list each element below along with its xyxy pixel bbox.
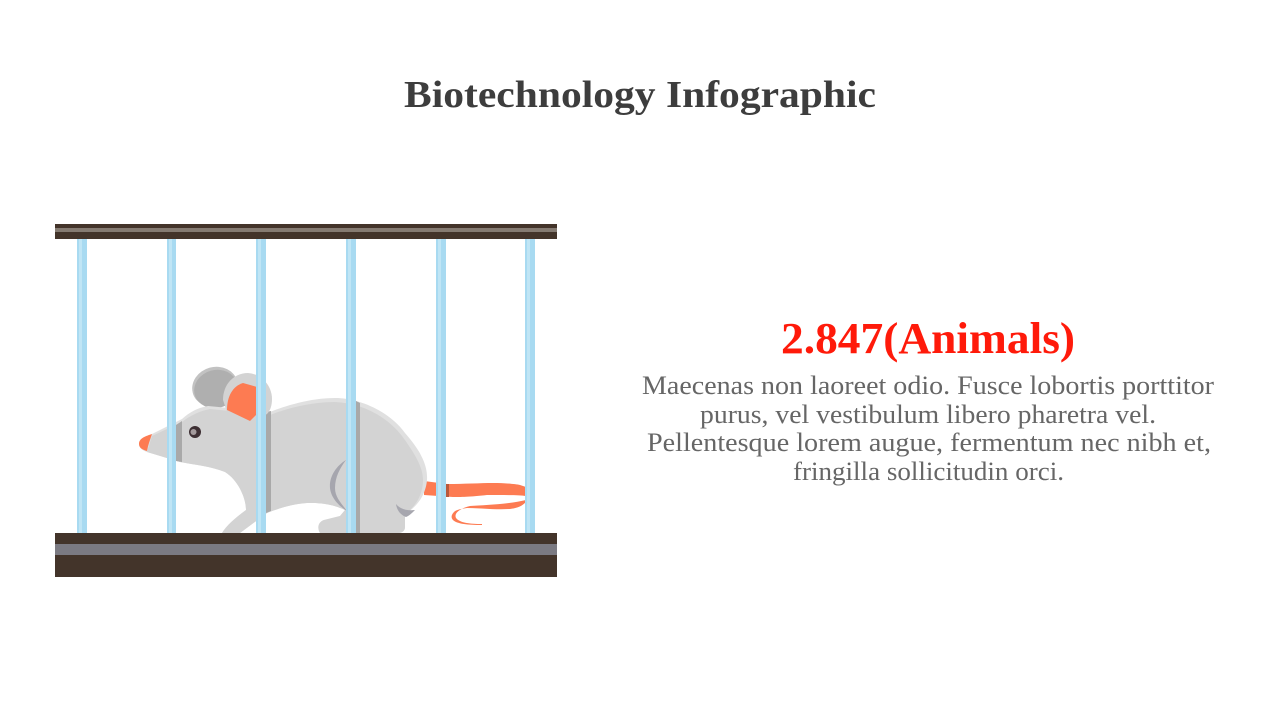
icon: mouse body	[139, 398, 427, 533]
cage bottom rail	[55, 533, 557, 577]
illustration: mouse in a cage	[55, 224, 557, 577]
text block: description: fringilla sollicitudin orci.	[793, 457, 1064, 486]
text block: description: Pellentesque lorem augue, fermentum nec nibh et,	[647, 428, 1211, 457]
text block: description: Maecenas non laoreet odio. Fusce lobortis porttitor	[642, 371, 1214, 400]
icon: mouse tail	[424, 481, 526, 525]
callout: animal count: 2.847(Animals)	[781, 314, 1075, 363]
cage bars	[77, 238, 535, 534]
band: neck shadow	[176, 421, 182, 462]
icon: mouse far ear	[188, 362, 242, 413]
icon: mouse nose	[139, 434, 152, 451]
icon: mouse near ear	[223, 373, 272, 424]
leg outline	[330, 460, 347, 511]
band: rear shadow	[356, 401, 360, 533]
title: Biotechnology Infographic	[404, 74, 876, 116]
cage top rail	[55, 224, 557, 239]
text block: description: purus, vel vestibulum libero pharetra vel.	[700, 400, 1156, 429]
icon: mouse eye	[189, 426, 201, 438]
text block: description	[642, 371, 1214, 486]
foot shadow	[396, 504, 415, 517]
band: shoulder shadow	[266, 411, 271, 513]
